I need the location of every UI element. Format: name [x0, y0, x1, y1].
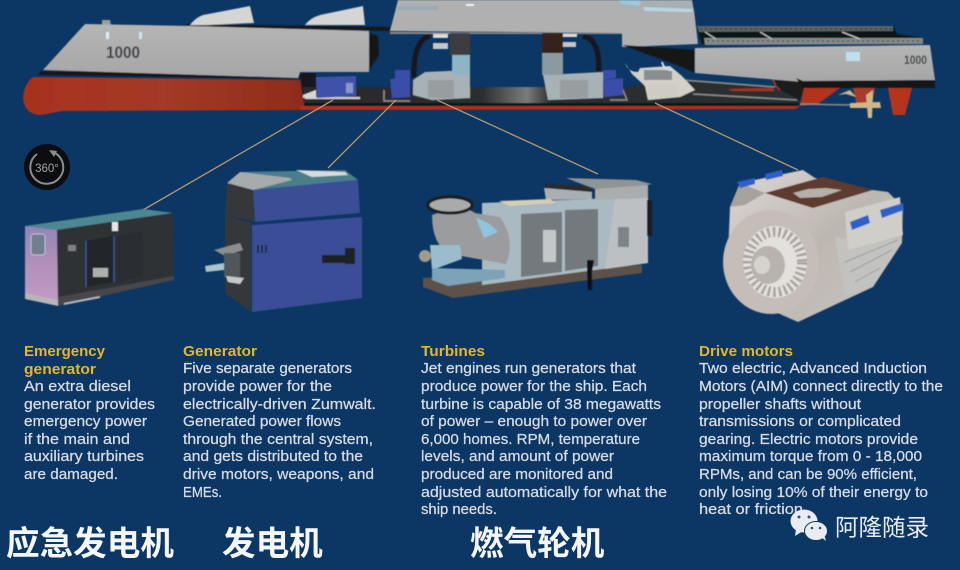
- text: emergency generator: An extra diesel: [24, 378, 131, 395]
- propeller: [838, 90, 881, 118]
- hull bulkheads: [300, 73, 316, 100]
- left engine group: [384, 55, 470, 101]
- text: drive motors: propeller shafts without: [699, 396, 862, 413]
- text: generator: Five separate generators: [183, 360, 352, 377]
- generator illustration: [205, 170, 362, 312]
- machinery floor: [303, 80, 800, 104]
- text: turbines: adjusted automatically for what the: [421, 484, 667, 501]
- text: drive motors: [699, 343, 943, 518]
- right exhaust and pipes: [542, 33, 599, 78]
- icon: wechat: [790, 510, 828, 541]
- emergency generator in ship: [316, 76, 356, 98]
- ship cutaway: [23, 0, 935, 118]
- stern compartment: [774, 75, 804, 100]
- text: emergency generator: Emergency: [24, 343, 106, 360]
- aft hull number: 1000: [904, 53, 927, 67]
- forward hull number: 1000: [106, 43, 140, 62]
- text: emergency generator: auxiliary turbines: [24, 448, 144, 465]
- text: turbines: turbine is capable of 38 megawatts: [421, 396, 661, 413]
- text: generator: [183, 343, 376, 501]
- text: drive motors: only losing 10% of their energy to: [699, 484, 928, 501]
- text: generator: Generated power flows: [183, 413, 341, 430]
- drive shafts: [683, 80, 850, 105]
- superstructure: [390, 0, 698, 47]
- text: generator: through the central system,: [183, 431, 373, 448]
- text: emergency generator: [24, 343, 155, 483]
- text: generator: Generator: [183, 343, 257, 360]
- text: emergency generator: emergency power: [24, 413, 147, 430]
- rudder: [888, 88, 912, 115]
- text: turbines: ship needs.: [421, 501, 497, 518]
- text: emergency generator: if the main and: [24, 431, 130, 448]
- text: drive motors: transmissions or complicated: [699, 413, 901, 430]
- text: drive motors: heat or friction: [699, 501, 803, 518]
- text: generator: drive motors, weapons, and: [183, 466, 374, 483]
- text: drive motors: RPMs, and can be 90% efficient,: [699, 466, 917, 483]
- drive motors in ship: [625, 62, 695, 100]
- text: turbines: of power – enough to power over: [421, 413, 647, 430]
- text: emergency generator: generator: [24, 361, 96, 378]
- text: turbines: produced are monitored and: [421, 466, 613, 483]
- chinese label: emergency generator: 应急发电机: [6, 525, 174, 563]
- text: turbines: 6,000 homes. RPM, temperature: [421, 431, 640, 448]
- text: turbines: levels, and amount of power: [421, 448, 614, 465]
- aft hull: [695, 45, 935, 82]
- hull stripe: [38, 71, 300, 79]
- red hull: [23, 77, 304, 115]
- left exhaust and pipes: [414, 33, 470, 78]
- icon: 360 badge: 360°: [35, 163, 59, 175]
- text: turbines: produce power for the ship. Each: [421, 378, 647, 395]
- aft deck: [697, 26, 923, 45]
- icon: 360 badge: [24, 144, 70, 190]
- emergency generator illustration: [25, 209, 174, 306]
- text: drive motors: Two electric, Advanced Induction: [699, 360, 927, 377]
- text: generator: electrically-driven Zumwalt.: [183, 396, 376, 413]
- stern red: [800, 88, 840, 106]
- text: generator: and gets distributed to the: [183, 448, 363, 465]
- text: drive motors: gearing. Electric motors provide: [699, 431, 918, 448]
- forward hull: [43, 24, 369, 78]
- chinese label: generator: 发电机: [222, 525, 323, 563]
- drive motor illustration: [723, 170, 904, 322]
- text: drive motors: Drive motors: [699, 343, 793, 360]
- strut: [853, 88, 875, 107]
- text: turbines: Turbines: [421, 343, 485, 360]
- watermark text: 阿隆随录: [835, 514, 929, 540]
- callout lines: [143, 100, 798, 210]
- text: emergency generator: generator provides: [24, 396, 155, 413]
- text: drive motors: Motors (AIM) connect directly to the: [699, 378, 943, 395]
- text: drive motors: maximum torque from 0 - 18,000: [699, 448, 922, 465]
- forward gun turrets: [102, 6, 392, 31]
- turbine illustration: [419, 178, 652, 298]
- text: turbines: [421, 343, 667, 518]
- text: generator: EMEs.: [183, 484, 222, 501]
- red keel line: [300, 106, 800, 110]
- text: turbines: Jet engines run generators that: [421, 360, 637, 377]
- right engine group: [542, 53, 627, 100]
- text: emergency generator: are damaged.: [24, 466, 118, 483]
- text: generator: provide power for the: [183, 378, 332, 395]
- chinese label: gas turbine: 燃气轮机: [470, 525, 605, 563]
